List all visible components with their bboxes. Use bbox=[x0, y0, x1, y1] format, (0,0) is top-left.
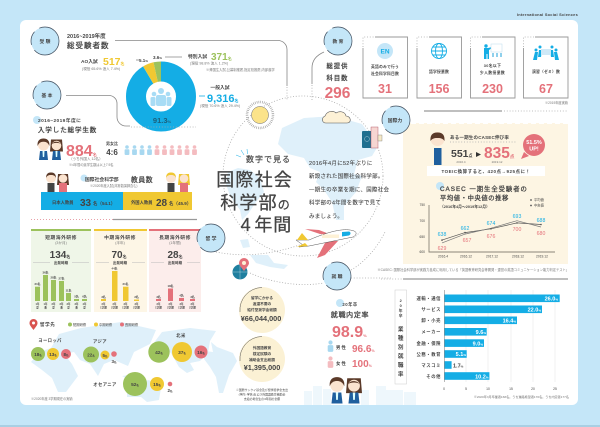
panel: 短期海外研修: 2年 bbox=[59, 303, 64, 306]
callout: scholarship total: 給付型奨学金総額 bbox=[247, 307, 277, 312]
note: scholarship: ※国際サンケイ基金及び留学奨学金支出 bbox=[236, 387, 288, 392]
icon: 国際力 badge bbox=[382, 106, 410, 134]
icon: gender ratio row bbox=[125, 145, 197, 155]
bar chart: 26.0% bbox=[545, 296, 558, 302]
map legend: 留学先 bbox=[40, 321, 55, 328]
panel: 長期海外研修: 2学期 bbox=[189, 306, 196, 310]
panel: 中期海外研修: (半年) bbox=[115, 240, 125, 245]
icon: 就職 badge bbox=[323, 262, 351, 290]
stat: 総提供科目数 bbox=[325, 61, 351, 102]
card: 語学授業数: 語学授業数 bbox=[429, 69, 449, 74]
region: 北米: 42名 bbox=[155, 350, 163, 356]
bar chart: 25 bbox=[553, 387, 557, 391]
line chart: 688 bbox=[537, 218, 545, 224]
panel: 長期海外研修: 1学期 bbox=[178, 306, 185, 310]
label: AO入試: (現役 65.6% 浪人 7.4%) bbox=[82, 66, 120, 71]
panel: 中期海外研修: 44名 bbox=[112, 266, 118, 270]
card: 少人数授業数: 230 bbox=[482, 82, 503, 96]
line chart: 2017.12 bbox=[486, 254, 498, 258]
panel: 短期海外研修: 36名 bbox=[43, 270, 49, 274]
panel: 中期海外研修: 中期海外研修 bbox=[104, 234, 136, 241]
stat: 男女比: 男女比 bbox=[106, 140, 118, 146]
icon: airplane bbox=[296, 229, 356, 258]
map legend: 長期研修 bbox=[125, 322, 139, 327]
card: 演習数 bbox=[524, 37, 568, 98]
bar: 外国人教員: 28 bbox=[156, 198, 168, 209]
panel: 短期海外研修: 春 bbox=[60, 306, 63, 310]
bar chart: 10.2% bbox=[475, 374, 489, 380]
line chart: 750 bbox=[419, 203, 425, 207]
box: vertical label: 別 bbox=[398, 343, 404, 351]
bar: 日本人教員: 33 bbox=[80, 198, 92, 209]
bar chart: 0 bbox=[443, 387, 445, 391]
region: 北米: 37名 bbox=[178, 350, 186, 356]
label: 一般入試: (現役 70.6% 浪人 29.4%) bbox=[200, 103, 240, 108]
icon: 就職 badge: 就 職 bbox=[332, 273, 343, 280]
region: オセアニア: 52名 bbox=[131, 382, 139, 388]
callout: exam subsidy: ¥1,395,000 bbox=[244, 363, 280, 372]
box: vertical label: 就 bbox=[398, 352, 404, 360]
icon: student bbox=[430, 132, 445, 165]
stat: 884名: ※4年間の延学生数は以上7.9名 bbox=[69, 162, 113, 167]
line chart: 629 bbox=[438, 246, 446, 252]
heading: 教員数: 教員数 bbox=[131, 175, 153, 184]
panel: 長期海外研修: 3名 bbox=[156, 295, 161, 299]
card: 英語のみ: 英語のみで行う bbox=[371, 64, 399, 69]
panel: 中期海外研修: 2学期 bbox=[133, 306, 140, 310]
heading: CASEC chart: （2016年4月～2019年12月） bbox=[440, 204, 490, 209]
icon: pin on globe bbox=[232, 258, 249, 280]
icon: 受験 badge bbox=[31, 27, 59, 55]
icon: buildings bbox=[304, 386, 416, 405]
card: 少人数授業数: 少人数授業数 bbox=[480, 70, 505, 75]
stat: 884名: （うち外国人 12名） bbox=[69, 156, 103, 161]
donut chart bbox=[136, 72, 186, 125]
panel: 短期海外研修: 出発時期 bbox=[54, 260, 69, 265]
stat: 女性: 女 性 bbox=[336, 360, 346, 367]
stat: 就職内定率: 20年卒 bbox=[342, 301, 358, 308]
icon: 留学 badge: 留 学 bbox=[206, 235, 217, 242]
bar chart: 16.4% bbox=[503, 318, 516, 324]
label: 特別入試: 3.6% bbox=[153, 55, 162, 60]
panel: 長期海外研修: 3名 bbox=[190, 295, 195, 299]
box: vertical label: 卒 bbox=[399, 314, 403, 318]
label: 特別入試: 371名 bbox=[211, 52, 232, 63]
label: 特別入試: (現役 98.8% 浪人 1.2%) bbox=[190, 60, 228, 66]
title: 科学部の bbox=[220, 193, 291, 213]
text block: intro: 2016年4月に52年ぶりに bbox=[309, 159, 373, 167]
panel: 長期海外研修: 4名 bbox=[179, 294, 184, 298]
panel: 短期海外研修: 5名 bbox=[74, 294, 79, 298]
icon: 教育 badge bbox=[324, 27, 352, 55]
card: 英語のみ bbox=[363, 37, 408, 98]
section: 国際力 bbox=[377, 106, 569, 272]
heading: 入学した総学生数: 2016~2019年度に bbox=[38, 117, 81, 124]
heading: CASEC growth: ある一期生のCASEC伸び率 bbox=[450, 134, 509, 141]
region: ヨーロッパ: 8名 bbox=[63, 352, 69, 357]
bar chart: 金融・保険 bbox=[417, 340, 441, 347]
bar chart: 5 bbox=[465, 387, 467, 391]
region: オセアニア: 2名 bbox=[167, 388, 173, 393]
card: 少人数授業数 bbox=[470, 37, 515, 98]
panel: 短期海外研修: 27名 bbox=[59, 276, 65, 280]
panel: 長期海外研修 bbox=[149, 229, 201, 312]
donut chart: 91.3% bbox=[153, 116, 172, 125]
icon: 基本 badge: 基 本 bbox=[42, 92, 53, 99]
stat: 就職内定率 bbox=[331, 299, 369, 341]
callout: 51.5% UP bbox=[521, 134, 545, 159]
label: AO入試: AO入試 bbox=[81, 58, 98, 65]
panel: 短期海外研修: 4年 bbox=[82, 303, 87, 306]
bar chart: メーカー bbox=[421, 328, 441, 336]
text block: intro: 新設された国際社会科学部。 bbox=[309, 172, 384, 180]
icon: graduates bbox=[330, 377, 362, 404]
label: AO入試 bbox=[81, 56, 148, 71]
title bbox=[216, 149, 293, 235]
heading: 入学した総学生数 bbox=[33, 116, 97, 134]
line chart: 2019.12 bbox=[536, 254, 548, 258]
region: ヨーロッパ: 18名 bbox=[34, 352, 42, 357]
box: vertical label: 業 bbox=[398, 325, 404, 333]
line chart: 平均値 bbox=[534, 197, 545, 202]
stat: 男性: 96.6% bbox=[352, 344, 375, 355]
section: 就職 bbox=[323, 262, 375, 404]
stat: 551 to 835: 2016.4 bbox=[456, 160, 466, 164]
bar chart: サービス bbox=[421, 306, 441, 313]
stat: 男女比 bbox=[106, 140, 118, 157]
stat: 551 to 835: 835点 bbox=[484, 145, 515, 162]
bar: 外国人教員: 外国人教員 bbox=[131, 199, 153, 206]
box: vertical label: 職 bbox=[398, 361, 404, 369]
heading: CASEC chart: 平均値・中央値の推移 bbox=[440, 193, 509, 202]
card: 英語のみ: 31 bbox=[378, 82, 392, 96]
stat: 女性 bbox=[328, 356, 373, 370]
bar chart: マスコミ bbox=[421, 363, 441, 369]
card: 演習数: 67 bbox=[539, 82, 553, 96]
panel: CASEC bbox=[403, 123, 568, 264]
title: 国際社会 bbox=[216, 170, 293, 190]
heading: 教員数 bbox=[80, 174, 153, 188]
panel: 中期海外研修: 2名 bbox=[134, 295, 139, 299]
panel: 短期海外研修: 11名 bbox=[66, 288, 72, 292]
panel: 中期海外研修: 70名 bbox=[111, 250, 127, 261]
region: オセアニア bbox=[93, 372, 173, 396]
text block: intro: 科学部の4年間を数字で見て bbox=[309, 198, 381, 206]
stat: 就職内定率: 98.9% bbox=[332, 324, 367, 341]
panel: 長期海外研修: (1年間) bbox=[169, 240, 181, 245]
note: CASEC: ※CASEC: 国際社会科学部が実践力養成に利用している「英語教育研究会等開発・運営の英語コミュニケーション能力判定テスト」 bbox=[377, 267, 569, 272]
icon: passport and papers bbox=[362, 127, 382, 148]
panel: 中期海外研修: 21名 bbox=[123, 282, 129, 286]
callout: exam subsidy bbox=[239, 336, 285, 382]
centre globe with dotted ring bbox=[216, 96, 391, 285]
region: 北米: 北米 bbox=[176, 332, 186, 339]
header label: International Social Sciences bbox=[517, 12, 578, 17]
panel: 短期海外研修: 21名 bbox=[35, 282, 41, 286]
icon: students bbox=[38, 138, 63, 160]
label: 一般入試: 一般入試 bbox=[210, 84, 230, 91]
icon: foreign faculty bbox=[166, 172, 190, 192]
region: オセアニア: 15名 bbox=[153, 382, 161, 388]
icon: 受験 badge: 受 験 bbox=[40, 38, 51, 45]
bar chart bbox=[417, 290, 560, 391]
panel: 中期海外研修: 2学期 bbox=[111, 306, 118, 310]
banner: TOEIC bbox=[427, 166, 545, 176]
bar: 日本人教員 bbox=[41, 192, 123, 210]
icon: Japanese faculty bbox=[46, 172, 69, 192]
panel: 長期海外研修: 出発時期 bbox=[168, 260, 183, 265]
panel: 短期海外研修: 1年 bbox=[43, 303, 48, 306]
stat: 884名: 884名 bbox=[66, 143, 97, 160]
panel: 短期海外研修: 春 bbox=[75, 306, 78, 310]
label: 特別入試 bbox=[153, 52, 275, 72]
panel: 短期海外研修: 1年 bbox=[35, 303, 40, 306]
line chart: 674 bbox=[487, 221, 495, 227]
callout: scholarship total bbox=[239, 287, 285, 333]
line chart: 676 bbox=[487, 234, 495, 240]
callout: 51.5% UP: UP! bbox=[529, 146, 539, 152]
stat: 551 to 835: 2019.12 bbox=[492, 160, 503, 164]
panel: 長期海外研修: 28名 bbox=[167, 250, 183, 261]
icon: 教育 badge: 教 育 bbox=[333, 38, 344, 45]
section: 教育 bbox=[312, 27, 569, 105]
panel: 中期海外研修: 出発時期 bbox=[113, 260, 128, 265]
heading: 総受験者数: 総受験者数 bbox=[67, 40, 110, 50]
stat: 就職内定率: 就職内定率 bbox=[331, 310, 369, 319]
note: scholarship: 支給の場合生の3年間の金額 bbox=[244, 396, 280, 401]
label: 一般入試: 9,316名 bbox=[207, 93, 239, 105]
panel: 中期海外研修: 3名 bbox=[101, 295, 106, 299]
banner: TOEIC: TOEIC換算すると、420点→925点に！ bbox=[441, 168, 531, 175]
bar: 日本人教員: 名（54.1） bbox=[93, 200, 115, 207]
note: scholarship bbox=[236, 387, 288, 401]
region: ヨーロッパ: ヨーロッパ bbox=[38, 337, 62, 343]
callout: 51.5% UP: 51.5% bbox=[526, 140, 542, 146]
panel: 短期海外研修: 6名 bbox=[82, 294, 87, 298]
line chart: 2018.12 bbox=[512, 254, 524, 258]
note: map: ※2020年度 3学期現在の実績 bbox=[31, 396, 73, 401]
panel: 短期海外研修: 春 bbox=[44, 306, 47, 310]
panel: 長期海外研修: 18名 bbox=[168, 284, 174, 288]
icon: cloud bbox=[322, 111, 350, 123]
stat: 総提供科目数: 総提供 bbox=[327, 61, 348, 70]
label: 一般入試 bbox=[199, 84, 240, 108]
region: アジア: 22名 bbox=[87, 352, 95, 358]
line chart: 700 bbox=[419, 219, 425, 223]
box: vertical label bbox=[395, 290, 406, 384]
panel: 短期海外研修 bbox=[31, 229, 91, 312]
region: アジア bbox=[83, 339, 117, 364]
label: AO入試: 5.1% bbox=[139, 58, 148, 63]
panel: 長期海外研修: 3年 bbox=[190, 303, 195, 306]
map legend bbox=[30, 319, 139, 330]
panel: 中期海外研修: 1学期 bbox=[122, 306, 129, 310]
world map background bbox=[31, 322, 237, 402]
card: 演習数: 演習（ゼミ）数 bbox=[532, 69, 560, 74]
note: employment: ※2020年3月卒業者168名。うち進路希望者170名。うち内定者177名 bbox=[474, 394, 569, 399]
line chart: 638 bbox=[438, 232, 446, 238]
bar chart: 22.0% bbox=[528, 308, 541, 314]
panel: 中期海外研修 bbox=[94, 229, 147, 312]
panel: 長期海外研修: 1学期 bbox=[155, 306, 162, 310]
text block: intro: 一期生の卒業を期に、国際社会 bbox=[309, 186, 389, 194]
line chart: 2016.12 bbox=[460, 254, 472, 258]
card: 少人数授業数: 30名以下 bbox=[484, 63, 501, 68]
bar chart: 1.7% bbox=[453, 363, 464, 369]
line chart bbox=[419, 197, 555, 258]
box: vertical label: 2 bbox=[400, 299, 402, 303]
bar chart: 卸・小売 bbox=[421, 317, 441, 324]
title: 4年間 bbox=[241, 215, 292, 235]
panel: 長期海外研修: 2年 bbox=[156, 303, 161, 306]
line chart: 650 bbox=[419, 235, 425, 239]
panel: 中期海外研修: 3年 bbox=[123, 303, 128, 306]
card: 語学授業数 bbox=[417, 37, 462, 98]
heading: 総受験者数 bbox=[67, 32, 110, 50]
region: ヨーロッパ bbox=[31, 337, 71, 361]
heading: CASEC chart: CASEC 一期生全受験者の bbox=[440, 184, 528, 193]
panel: 長期海外研修: 2学期 bbox=[167, 306, 174, 310]
icon: 基本 badge bbox=[33, 81, 61, 109]
panel: 長期海外研修: 2年 bbox=[168, 303, 173, 306]
label: 特別入試: ※帰国生入試,公募制推薦,指定校推薦,内部進学 bbox=[206, 67, 275, 72]
line chart: 600 bbox=[419, 250, 425, 254]
bar: 外国人教員 bbox=[123, 192, 192, 210]
title: 数字で見る bbox=[246, 154, 291, 164]
panel: 短期海外研修: 3年 bbox=[74, 303, 79, 306]
text block: intro: みましょう。 bbox=[309, 213, 343, 220]
map legend: 短期研修 bbox=[73, 322, 87, 327]
bar chart: 5.1% bbox=[456, 352, 466, 358]
panel: 短期海外研修: 夏 bbox=[67, 306, 70, 310]
bar chart: 15 bbox=[509, 387, 513, 391]
callout: exam subsidy: 補助金支出総額 bbox=[249, 357, 275, 362]
box: vertical label: 年 bbox=[399, 308, 403, 313]
line chart: 657 bbox=[463, 238, 471, 244]
stat: 男性 bbox=[328, 340, 375, 355]
heading: 教員数: ※2020年度入試(非常勤講師含む) bbox=[90, 183, 137, 188]
line chart: 700 bbox=[513, 227, 521, 233]
label: AO入試: 517名 bbox=[103, 56, 125, 68]
stat: 男女比: 4:6 bbox=[106, 148, 118, 157]
heading: 入学した総学生数: 入学した総学生数 bbox=[38, 125, 97, 134]
bar: 日本人教員: 日本人教員 bbox=[52, 199, 74, 206]
bar chart: 20 bbox=[531, 387, 535, 391]
bar chart: 9.0% bbox=[473, 341, 483, 347]
bar: 外国人教員: 名（45.9） bbox=[169, 200, 191, 207]
panel: 短期海外研修: 夏 bbox=[83, 306, 86, 310]
panel: 長期海外研修: 長期海外研修 bbox=[159, 234, 191, 241]
region: 北米: 16名 bbox=[197, 350, 205, 356]
bar chart: その他 bbox=[426, 373, 441, 380]
stat: 551 to 835: 551点 bbox=[451, 148, 473, 160]
heading: CASEC chart bbox=[436, 182, 528, 209]
panel: 中期海外研修: 1学期 bbox=[100, 306, 107, 310]
card: 英語のみ: EN bbox=[380, 48, 390, 56]
panel: 短期海外研修: (3か月) bbox=[55, 240, 67, 245]
stat: 女性: 100% bbox=[352, 359, 373, 370]
stat: 884名 bbox=[66, 143, 113, 167]
box: vertical label: 0 bbox=[400, 304, 402, 308]
callout: scholarship total: ¥66,044,000 bbox=[241, 314, 281, 323]
stat: 総提供科目数: 296 bbox=[325, 85, 351, 102]
bar chart: 公務・教育 bbox=[417, 351, 441, 358]
callout: exam subsidy: 外国語教育 bbox=[253, 345, 272, 350]
callout: scholarship total: 留学にかかる bbox=[251, 295, 273, 300]
region: アジア: 3名 bbox=[111, 359, 117, 364]
text block: intro bbox=[309, 159, 389, 220]
region: 北米 bbox=[148, 332, 208, 363]
panel: 中期海外研修: 2年 bbox=[101, 303, 106, 306]
map legend: 中期研修 bbox=[99, 322, 113, 327]
callout: exam subsidy: 検定試験の bbox=[253, 351, 272, 356]
icon: sun bbox=[247, 102, 273, 128]
bar chart: 9.6% bbox=[476, 330, 486, 336]
panel: 短期海外研修: 134名 bbox=[50, 250, 70, 261]
box: vertical label: 種 bbox=[398, 334, 404, 342]
bar chart: 10 bbox=[486, 387, 490, 391]
region: アジア: 5名 bbox=[102, 353, 108, 358]
icon: 留学 badge bbox=[197, 224, 225, 252]
icon: 国際力 badge: 国際力 bbox=[388, 117, 402, 124]
panel: 短期海外研修: 夏 bbox=[36, 306, 39, 310]
region: オセアニア: オセアニア bbox=[93, 381, 117, 388]
box: vertical label: 率 bbox=[398, 370, 404, 378]
heading: 教員数: 国際社会科学部 bbox=[85, 176, 119, 183]
heading: 総受験者数: 2016~2019年度 bbox=[67, 32, 106, 40]
panel: 長期海外研修: 3年 bbox=[179, 303, 184, 306]
line chart: 662 bbox=[461, 226, 469, 232]
section: 受験 bbox=[31, 27, 287, 125]
card: 語学授業数: 156 bbox=[429, 82, 449, 96]
line chart: 2016.4 bbox=[438, 254, 448, 258]
card: 英語のみ: 社会科学科目数 bbox=[371, 71, 399, 76]
panel: 短期海外研修: 3年 bbox=[66, 303, 71, 306]
note: 教育: ※2019年度実績 bbox=[545, 100, 569, 105]
region: ヨーロッパ: 13名 bbox=[49, 352, 57, 357]
stat: 男性: 男 性 bbox=[336, 344, 346, 351]
section: 業種別就職率 bbox=[395, 290, 569, 399]
panel: 中期海外研修: 3年 bbox=[134, 303, 139, 306]
bar chart: 運輸・通信 bbox=[417, 295, 441, 302]
panel: 短期海外研修: 2年 bbox=[51, 303, 56, 306]
line chart: 693 bbox=[513, 214, 521, 220]
line chart: 680 bbox=[537, 231, 545, 237]
section: 基本 bbox=[33, 81, 197, 210]
label: 特別入試: 特別入試 bbox=[188, 53, 207, 60]
stat: 551 to 835 bbox=[451, 145, 515, 164]
panel: 中期海外研修: 2年 bbox=[112, 303, 117, 306]
line chart: 中央値 bbox=[534, 202, 545, 208]
panel: 短期海外研修: 28名 bbox=[51, 276, 57, 280]
callout: scholarship total: 返還不要の bbox=[253, 301, 272, 306]
panel: 短期海外研修: 夏 bbox=[52, 306, 55, 310]
section: 留学 bbox=[30, 224, 225, 401]
note: scholarship: (学内･学外)および外国語教育補助金 bbox=[239, 392, 285, 396]
region: アジア: アジア bbox=[93, 339, 107, 345]
panel: 短期海外研修: 短期海外研修 bbox=[45, 234, 77, 241]
stat: 総提供科目数: 科目数 bbox=[327, 73, 348, 82]
